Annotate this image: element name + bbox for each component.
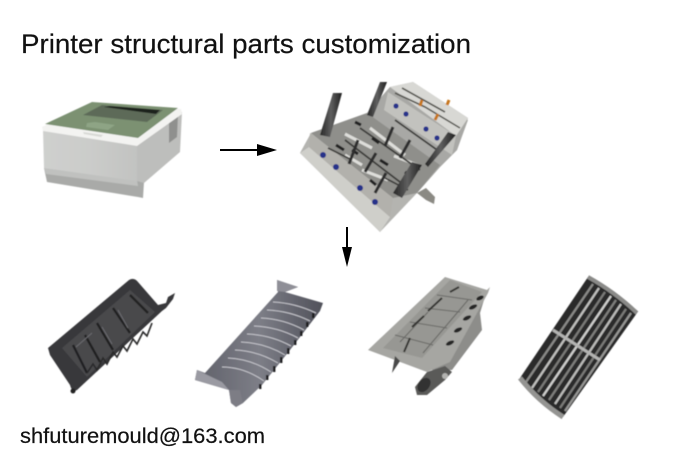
contact email: shfuturemould@163.com [20, 425, 265, 448]
part: slatted cylinder [520, 277, 637, 417]
part: grey flap with hinge [368, 277, 490, 395]
part: curved grey ribbed plate [195, 280, 323, 407]
title: Printer structural parts customization [21, 29, 471, 59]
arrow: printer to mould [220, 144, 277, 156]
icon: printer [42, 102, 182, 198]
silver highlights on mould bed [345, 128, 420, 180]
part: dark ribbed cover [48, 279, 175, 394]
arrow: mould to parts [342, 227, 352, 267]
icon: injection mould [300, 82, 468, 232]
